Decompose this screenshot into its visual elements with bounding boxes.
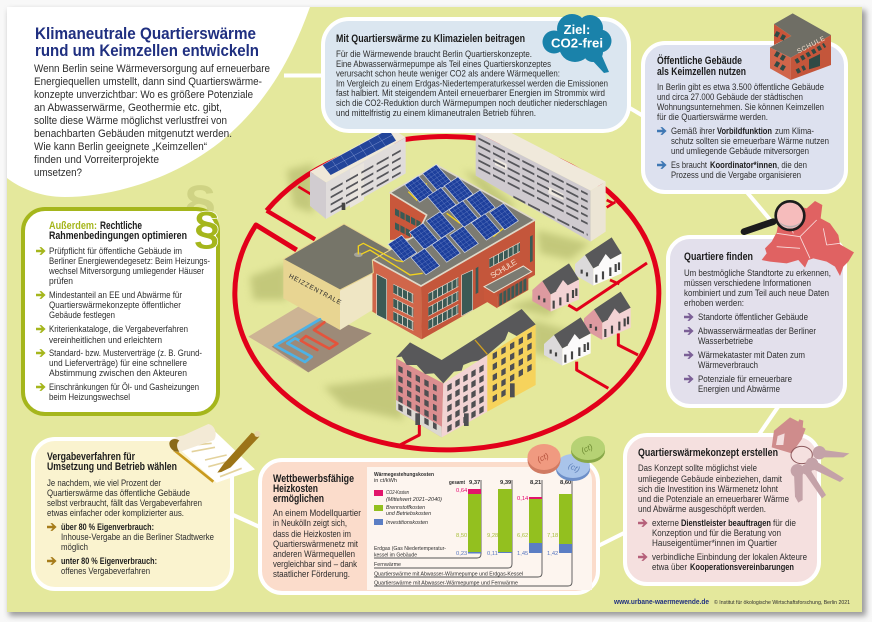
- intro text: [34, 63, 270, 179]
- climate text: sich die CO2-Reduktion durch Wärmepumpen noch deutlicher niederschlagen: [336, 98, 607, 108]
- chart: heat generation costs: [367, 467, 592, 590]
- legal heading: [49, 220, 187, 242]
- bullet: above 80 percent: über 80 % Eigenverbrauch:: [61, 522, 154, 533]
- legal bullet list: wechsel Mitversorgung umliegender Häuser: [48, 266, 205, 277]
- bullet: Koordinator: , die den: [777, 160, 807, 171]
- heat concept text: sich die Investition ins Wärmenetz lohnt: [638, 484, 778, 495]
- bullet: Koordinator: [657, 160, 807, 181]
- neighbourhoods bullet list: Energien und Abwärme: [698, 384, 780, 395]
- intro text: benachbarten Gebäuden mitgenutzt werden.: [34, 128, 232, 140]
- chart leader lines: [374, 480, 572, 586]
- roof pipes: [408, 183, 503, 237]
- bullet: below 80 percent: [47, 556, 157, 577]
- building: school: [372, 164, 535, 339]
- bullet: external consultants: Dienstleister beauftragen: [681, 518, 771, 529]
- climate text: Im Vergleich zu einem Erdgas-Niedertemperaturkessel werden die Emissionen: [336, 78, 608, 88]
- costs heading: Wettbewerbsfähige: [273, 473, 354, 485]
- neighbourhoods bullet list: [684, 312, 817, 395]
- cloud: Ziel CO2-frei: CO2-frei: [551, 36, 603, 50]
- costs heading: [273, 473, 354, 505]
- neighbourhoods background: [668, 237, 845, 406]
- chart row labels: Erdgas (Gas Niedertemperatur-: [374, 546, 446, 552]
- costs panel background: [260, 460, 598, 593]
- heat concept text: umliegende Gebäude einbeziehen, damit: [638, 474, 782, 485]
- small detached houses: [532, 237, 631, 366]
- chart legend: Investitionskosten: [386, 520, 428, 526]
- bar: wastewater heat pump and gas boiler: 6,62: [517, 533, 528, 539]
- bar: district heating: 9,39: [500, 480, 512, 486]
- bullet: cooperation agreements: etwa über: [652, 562, 688, 573]
- icon: house keys: [772, 417, 849, 503]
- heat concept text: [638, 463, 789, 515]
- public buildings heading: Öffentliche Gebäude: [657, 54, 742, 67]
- bullet: above 80 percent: möglich: [61, 542, 88, 553]
- footer: [613, 597, 850, 606]
- yellow pipes: [354, 243, 423, 275]
- intro text: konzepte unverzichtbar: Wo es größere Potenziale: [34, 89, 253, 101]
- panel: tender procedures: [33, 424, 260, 589]
- bullet: Vorbildfunktion: schutz sollten sie erneuerbare Wärme nutzen: [671, 136, 829, 147]
- legal bullet list: Prüfpflicht für öffentliche Gebäude im: [49, 246, 182, 257]
- neighbourhoods text: kombiniert und zum Teil auch neue Daten: [684, 288, 829, 299]
- bar: wastewater heat pump and district heating: 7,18: [547, 533, 558, 539]
- bullet: Koordinator: Es braucht: [671, 160, 707, 171]
- title: Klimaneutrale Quartierswärme: [35, 25, 256, 43]
- intro text: umsetzen?: [34, 167, 82, 179]
- public buildings text: Wohnungsunternehmen. Sie können Keimzellen: [657, 102, 824, 113]
- neighbourhoods text: [684, 268, 831, 309]
- icon: Berlin map with magnifier: [744, 201, 854, 276]
- panel: legal framework: [23, 174, 220, 414]
- neighbourhoods bullet list: Standorte öffentlicher Gebäude: [698, 312, 808, 323]
- intro text: Wie kann Berlin geeignete „Keimzellen“: [34, 141, 207, 153]
- icon: paragraph sign: §: [194, 202, 220, 254]
- chart legend: (Mittelwert 2021–2040): [386, 497, 442, 503]
- bullet: cooperation agreements: [638, 552, 807, 573]
- chart title: [374, 472, 434, 484]
- legal heading: Rechtliche: [100, 220, 142, 232]
- chart title: in ct/kWh: [374, 478, 397, 484]
- intro text: an Abwasserwärme, Geothermie etc. gibt,: [34, 102, 222, 114]
- bar: natural gas: 0,23: [456, 551, 467, 557]
- public buildings text: und circa 27.000 Gebäude der städtischen: [657, 92, 803, 103]
- public buildings heading: als Keimzellen nutzen: [657, 66, 746, 78]
- legal heading: Außerdem:: [49, 220, 97, 232]
- panel connectors: [231, 76, 780, 546]
- footer: www.urbane-waermewende.de: [613, 597, 709, 606]
- bar: wastewater heat pump and district heating: 1,42: [547, 551, 558, 557]
- bullet: cooperation agreements: Kooperationsvereinbarungen: [690, 562, 794, 573]
- legal bullet list: Berliner Energiewendegesetz: Beim Heizungs-: [49, 256, 210, 267]
- costs text: vergleichbar sind – dank: [273, 559, 357, 570]
- icon: coins: (ct): [536, 451, 550, 464]
- bullet: external consultants: für die: [773, 518, 796, 529]
- geothermal pipes: [275, 319, 337, 362]
- heat concept text: und Abwärme ausgeschöpft werden.: [638, 504, 766, 515]
- bullet: above 80 percent: Inhouse-Vergabe an die Berliner Stadtwerke: [61, 532, 214, 543]
- chart row labels: kessel im Gebäude: [374, 552, 417, 558]
- costs text: in Neukölln zeigt sich,: [273, 518, 347, 529]
- tender heading: [47, 451, 177, 473]
- bar: wastewater heat pump and gas boiler: 8,21: [530, 480, 542, 486]
- intro text: sollte diese Wärme möglichst verlustfrei von: [34, 115, 227, 127]
- chart legend: CO2-Kosten: [386, 490, 409, 496]
- heat concept text: Das Konzept sollte möglichst viele: [638, 463, 757, 474]
- climate text: Für die Wärmewende braucht Berlin Quartierskonzepte.: [336, 49, 532, 59]
- chart title: Wärmegestehungskosten: [374, 472, 434, 478]
- school label: SCHULE: [489, 258, 519, 280]
- panel: competitive heating costs: [260, 460, 598, 593]
- ground shadows: [250, 163, 590, 420]
- bullet: Koordinator: Koordinator*innen: [710, 160, 777, 171]
- costs heading: Heizkosten: [273, 483, 318, 495]
- neighbourhoods bullet list: Abwasserwärmeatlas der Berliner: [698, 326, 817, 337]
- bullet: external consultants: externe: [652, 518, 679, 529]
- panel: heat concept: [625, 417, 849, 584]
- bar: natural gas: gesamt: [449, 480, 465, 486]
- bar: wastewater heat pump and gas boiler: [517, 480, 542, 557]
- tender text: etwas einfacher oder komplizierter aus.: [47, 508, 184, 519]
- icon: shadow paragraph sign: §: [184, 174, 216, 239]
- bar: natural gas: [449, 480, 481, 557]
- neighbourhoods bullet list: Wärmekataster mit Daten zum: [698, 350, 805, 361]
- legal bullet list: Abstimmung zwischen den Akteuren: [49, 368, 187, 379]
- footer: © Institut für ökologische Wirtschaftsforschung, Berlin 2021: [714, 599, 850, 606]
- bar: wastewater heat pump and district heating: [547, 480, 572, 557]
- solar panels on school roof: [388, 164, 518, 275]
- bullet: Koordinator: Prozess und die Vergabe organisieren: [671, 170, 801, 181]
- bullet: Vorbildfunktion: Vorbildfunktion: [717, 126, 772, 137]
- bar: wastewater heat pump and district heating: 8,60: [560, 480, 571, 486]
- icon: coins: (ct): [580, 442, 594, 455]
- climate text: Eine Abwasserwärmepumpe als Teil eines Quartierskonzeptes: [336, 59, 551, 69]
- legal bullet list: Kriterienkataloge, die Vergabeverfahren: [49, 324, 188, 335]
- heat concept background: [625, 435, 819, 584]
- cloud: Ziel CO2-frei: Ziel:: [564, 22, 590, 37]
- bullet: cooperation agreements: verbindliche Einbindung der lokalen Akteure: [652, 552, 807, 563]
- neighbourhoods bullet list: Wasserbetriebe: [698, 336, 753, 347]
- heating plant label: HEIZZENTRALE: [287, 273, 343, 307]
- neighbourhoods bullet list: Wärmeverbrauch: [698, 360, 758, 371]
- bar: natural gas: 8,50: [456, 533, 467, 539]
- legal bullet list: Einschränkungen für Öl- und Gasheizungen: [49, 382, 199, 393]
- icon: coins: (ct): [567, 461, 581, 474]
- climate text: [336, 49, 608, 118]
- panel: climate targets: [323, 14, 629, 131]
- panel: finding neighbourhoods: [668, 201, 854, 406]
- chart legend: und Betriebskosten: [386, 511, 431, 517]
- isometric neighbourhood scene: [235, 123, 659, 450]
- costs text: staatlicher Förderung.: [273, 569, 350, 580]
- chart row labels: Fernwärme: [374, 562, 401, 568]
- climate text: verursacht schon heute weniger CO2 als andere Wärmequellen:: [336, 68, 560, 78]
- bar: natural gas: 9,37: [469, 480, 480, 486]
- tender text: [47, 478, 202, 519]
- legal bullet list: und Lieferverträge) für eine schnellere: [49, 358, 187, 369]
- bullet: above 80 percent: [47, 522, 214, 553]
- bar: district heating: [487, 480, 512, 557]
- costs text: An einem Modellquartier: [273, 508, 362, 519]
- intro text: Energiequellen umstellt, dann sind Quartierswärme-: [34, 76, 262, 88]
- costs text: [273, 508, 362, 580]
- climate heading: Mit Quartierswärme zu Klimazielen beitragen: [336, 33, 525, 45]
- neighbourhoods text: müssen verschiedene Informationen: [684, 278, 811, 289]
- bar: district heating: 0,11: [487, 551, 498, 557]
- building: terraced city houses: [396, 309, 536, 437]
- chart background: [367, 467, 592, 590]
- costs heading: ermöglichen: [273, 493, 324, 505]
- chart legend: Brennstoffkosten: [386, 505, 425, 511]
- chart row labels: Quartierswärme mit Abwasser-Wärmepumpe und Erdgas-Kessel: [374, 572, 523, 578]
- chart row labels: Quartierswärme mit Abwasser-Wärmepumpe und Fernwärme: [374, 580, 518, 586]
- chart row labels: [374, 546, 523, 586]
- title: rund um Keimzellen entwickeln: [35, 42, 259, 60]
- bullet: Vorbildfunktion: Gemäß ihrer: [671, 126, 716, 137]
- costs text: dass die Heizkosten im: [273, 529, 351, 540]
- neighbourhoods bullet list: Potenziale für erneuerbare: [698, 374, 792, 385]
- bar: natural gas: 0,64: [456, 488, 468, 494]
- bullet: Vorbildfunktion: [657, 126, 829, 157]
- public buildings text: In Berlin gibt es etwa 3.500 öffentliche Gebäude: [657, 82, 824, 93]
- building: apartment block with solar roof: [310, 127, 406, 219]
- bullet: external consultants: [638, 518, 796, 549]
- legal bullet list: Mindestanteil an EE und Abwärme für: [49, 290, 183, 301]
- icon: notepad and pen: [169, 424, 260, 483]
- legal bullet list: [36, 246, 210, 403]
- climate panel background: [323, 19, 629, 131]
- icon: coins: [528, 436, 605, 481]
- bullet: Vorbildfunktion: und umliegende Gebäude mitversorgen: [671, 146, 809, 157]
- legal bullet list: beim Heizungswechsel: [49, 392, 130, 403]
- tender panel background: [33, 439, 232, 589]
- neighbourhoods heading: Quartiere finden: [684, 251, 753, 263]
- intro text: finden und Vorreiterprojekte: [34, 154, 159, 166]
- title: [35, 25, 259, 60]
- building: long apartment block: [476, 123, 606, 242]
- tender text: Quartierswärme das öffentliche Gebäude: [47, 488, 190, 499]
- bullet: external consultants: Hauseigentümer*innen im Quartier: [652, 538, 778, 549]
- legal bullet list: Gebäude festlegen: [49, 310, 115, 321]
- icon: school: SCHULE: [796, 35, 827, 55]
- tender text: Je nachdem, wie viel Prozent der: [47, 478, 162, 489]
- climate text: fast halbiert. Mit steigendem Anteil erneuerbarer Energien im Strommix wird: [336, 88, 605, 98]
- legal bullet list: Quartierswärmekonzepte öffentlicher: [49, 300, 182, 311]
- bar: wastewater heat pump and gas boiler: 1,45: [517, 551, 528, 557]
- chart legend: [374, 490, 442, 526]
- public buildings text: für die Quartierswärme werden.: [657, 112, 768, 123]
- bullet: below 80 percent: offenes Vergabeverfahren: [61, 566, 150, 577]
- climate text: und mittelfristig zu einem klimaneutralen Betrieb führen.: [336, 108, 536, 118]
- legal bullet list: prüfen: [49, 276, 73, 287]
- school windows: [393, 247, 520, 326]
- panel: intro: [7, 7, 310, 197]
- legal heading: Rahmenbedingungen optimieren: [49, 230, 187, 242]
- heat concept text: und die Potenziale an erneuerbarer Wärme: [638, 494, 789, 505]
- tender heading: Umsetzung und Betrieb wählen: [47, 461, 177, 473]
- costs text: Quartierswärmenetz mit: [273, 539, 358, 550]
- bar: district heating: 9,28: [487, 533, 498, 539]
- costs text: anderen Wärmequellen: [273, 549, 355, 560]
- legal panel background: [23, 209, 218, 414]
- bullet: Vorbildfunktion: zum Klima-: [775, 126, 814, 137]
- panel: public buildings: [643, 13, 846, 192]
- bullet: below 80 percent: unter 80 % Eigenverbrauch:: [61, 556, 157, 567]
- cloud: Ziel CO2-frei: [542, 14, 612, 73]
- public buildings text: [657, 82, 824, 123]
- heat network ring: [235, 137, 659, 450]
- tender heading: Vergabeverfahren für: [47, 451, 136, 463]
- heat concept heading: Quartierswärmekonzept erstellen: [638, 447, 778, 459]
- legal bullet list: Standard- bzw. Musterverträge (z. B. Grund-: [49, 348, 202, 359]
- tender text: selbst verbraucht, fällt das Vergabeverfahren: [47, 498, 202, 509]
- public buildings background: [643, 43, 846, 192]
- neighbourhoods text: Um bestmögliche Standtorte zu erkennen,: [684, 268, 831, 279]
- bar: wastewater heat pump and gas boiler: 0,14: [517, 496, 529, 502]
- legal bullet list: vereinheitlichen und erleichtern: [49, 335, 162, 346]
- intro text: Wenn Berlin seine Wärmeversorgung auf erneuerbare: [34, 63, 270, 75]
- public buildings heading: [657, 54, 746, 78]
- neighbourhoods text: erhoben werden:: [684, 298, 744, 309]
- building: heating plant: [248, 224, 423, 372]
- icon: school: [770, 13, 831, 80]
- intro background: [7, 7, 310, 197]
- bullet: external consultants: Konzeption und für die Beratung von: [652, 528, 781, 539]
